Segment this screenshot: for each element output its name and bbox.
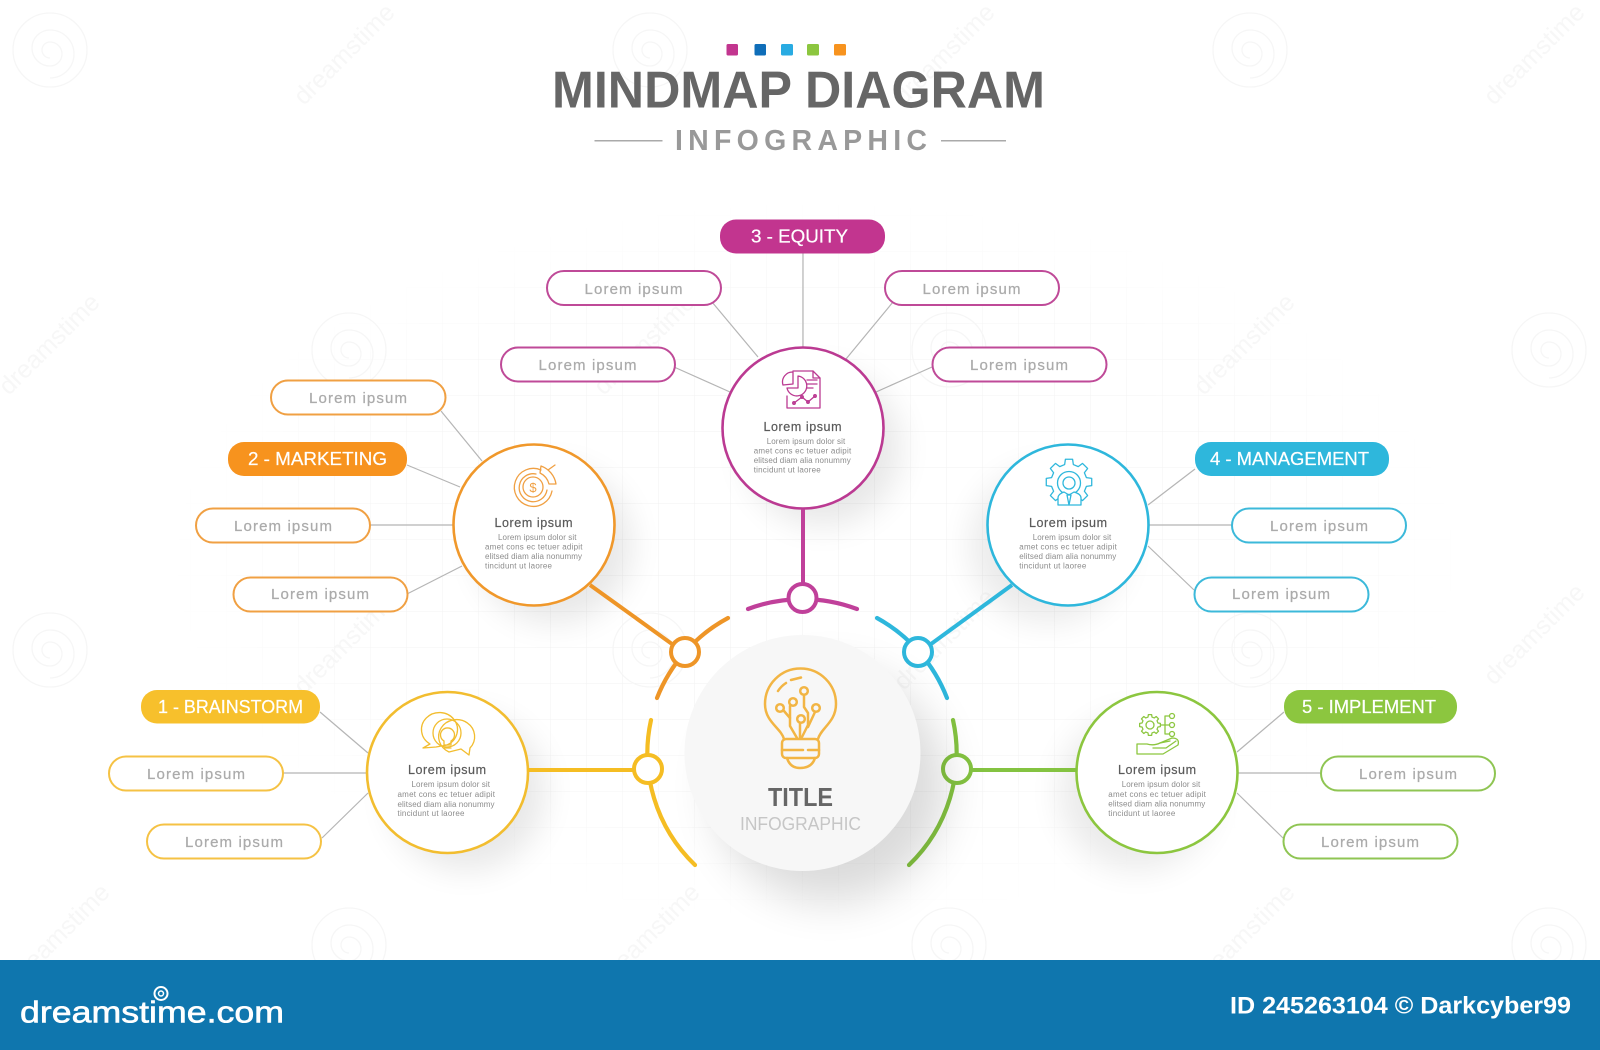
heading: Lorem ipsum: [494, 516, 572, 530]
footer credit: ID 245263104 © Darkcyber99: [1230, 992, 1571, 1019]
body text: tincidunt ut laoree: [754, 466, 821, 475]
branch: blue: [877, 585, 1012, 698]
pill: equity item 2: Lorem ipsum: [922, 281, 1020, 298]
pill: brainstorm item 2: Lorem ipsum: [185, 834, 283, 851]
central subtitle: INFOGRAPHIC: [740, 813, 861, 834]
heading: Lorem ipsum: [1029, 516, 1107, 530]
hub: arcs, nodes and connectors: [528, 509, 1077, 865]
pill: management item 2: [1194, 578, 1368, 612]
body text: Lorem ipsum dolor sit: [498, 533, 577, 542]
pill: marketing item 3: Lorem ipsum: [271, 586, 369, 603]
branch: purple: [748, 509, 857, 612]
panel: 1 brainstorm: [109, 690, 545, 870]
body text: amet cons ec tetuer adipit: [398, 790, 496, 799]
body text: elitsed diam alia nonummy: [1108, 800, 1205, 809]
pill: brainstorm item 1: Lorem ipsum: [147, 766, 245, 783]
background grid: [292, 268, 1337, 848]
pill: marketing item 2: Lorem ipsum: [234, 518, 332, 535]
circle shadow: [970, 467, 1126, 623]
tag: 1 brainstorm: [141, 690, 320, 724]
subtitle with rules: INFOGRAPHIC: [675, 125, 927, 157]
body text: Lorem ipsum dolor sit: [412, 780, 491, 789]
icon: gear, nodes and hand: [1137, 714, 1178, 754]
connectors: marketing: [370, 411, 482, 594]
central title: TITLE: [768, 782, 833, 812]
tag: 4 management: [1195, 442, 1389, 476]
body text: Lorem ipsum dolor sit: [1122, 780, 1201, 789]
body text: elitsed diam alia nonummy: [398, 800, 494, 809]
connectors: implement: [1237, 712, 1320, 838]
central circle: [684, 635, 946, 902]
circle: equity: [722, 348, 884, 508]
pill: equity item 4: [932, 348, 1106, 382]
heading: Lorem ipsum: [408, 763, 486, 777]
body text: [485, 533, 583, 570]
icon: report document: [783, 371, 820, 408]
circle shadow: [389, 714, 545, 870]
circle: brainstorm: [367, 692, 528, 853]
body text: Lorem ipsum dolor sit: [767, 437, 846, 446]
watermark layer: dreamstime: [1478, 0, 1590, 110]
icon: circuit light bulb: [765, 668, 836, 768]
footer logo: dreamstime.com: [20, 995, 284, 1030]
pill: equity item 1: [547, 271, 721, 305]
body text: [1019, 533, 1118, 571]
branch: orange: [590, 585, 728, 698]
body text: elitsed diam alia nonummy: [1019, 552, 1116, 561]
heading: Lorem ipsum: [764, 420, 842, 434]
watermark layer: dreamstime: [1188, 288, 1300, 400]
pill: management item 2: Lorem ipsum: [1232, 586, 1330, 603]
pill: equity item 3: [501, 348, 675, 382]
icon: speech bubbles with bulb: [421, 713, 475, 755]
pill: management item 1: Lorem ipsum: [1270, 518, 1368, 535]
watermark layer: dreamstime: [888, 0, 1000, 110]
body text: tincidunt ut laoree: [398, 809, 465, 818]
watermark layer: dreamstime: [3, 878, 115, 990]
body text: amet cons ec tetuer adipit: [1108, 790, 1207, 799]
body text: amet cons ec tetuer adipit: [1019, 542, 1118, 551]
central disc: [684, 635, 920, 871]
tag: 3 equity: 3 - EQUITY: [751, 226, 848, 246]
pill: management item 1: [1232, 508, 1406, 542]
pill: marketing item 3: [234, 578, 408, 612]
pill: implement item 2: [1284, 824, 1458, 858]
tag: 2 marketing: [228, 442, 407, 476]
colour squares: [726, 44, 846, 56]
body text: amet cons ec tetuer adipit: [485, 542, 583, 552]
pill: equity item 2: [885, 271, 1059, 305]
body text: amet cons ec tetuer adipit: [754, 446, 852, 455]
tag: 5 implement: 5 - IMPLEMENT: [1302, 697, 1436, 717]
connectors: equity: [674, 253, 932, 392]
pill: implement item 1: [1321, 756, 1495, 790]
branch: yellow: [528, 720, 695, 865]
main title: MINDMAP DIAGRAM: [552, 62, 1045, 120]
panel: 3 equity: [501, 220, 1106, 526]
pill: equity item 1: Lorem ipsum: [584, 281, 682, 298]
icon: dollar target: [514, 465, 556, 506]
watermark layer: dreamstime: [1188, 878, 1300, 990]
panel: 5 implement: [1059, 690, 1495, 870]
central shadow: [714, 670, 946, 902]
pill: marketing item 1: [271, 380, 446, 414]
tag: 2 marketing: 2 - MARKETING: [248, 449, 387, 469]
branch: green: [909, 720, 1077, 865]
body text: elitsed diam alia nonummy: [485, 552, 582, 561]
connectors: management: [1148, 469, 1232, 590]
circle: implement: [1076, 692, 1238, 853]
tag: 3 equity: [720, 220, 885, 254]
heading: Lorem ipsum: [1118, 763, 1196, 777]
body text: tincidunt ut laoree: [1108, 809, 1176, 818]
panel: 2 marketing: [196, 380, 632, 623]
circle: management: [988, 444, 1148, 606]
icon: gear with person: [1046, 459, 1092, 505]
watermark layer: dreamstime: [888, 583, 1000, 695]
footer band: [0, 960, 1600, 1050]
pill: brainstorm item 1: [109, 756, 283, 790]
tag: 5 implement: [1284, 690, 1457, 724]
body text: elitsed diam alia nonummy: [754, 456, 851, 465]
watermark layer: dreamstime: [593, 878, 705, 990]
body text: [754, 437, 852, 475]
watermark layer: dreamstime: [1478, 578, 1590, 690]
pill: brainstorm item 2: [147, 824, 321, 858]
pill: marketing item 2: [196, 508, 370, 542]
pill: equity item 3: Lorem ipsum: [538, 357, 636, 374]
body text: [398, 780, 496, 818]
tag: 1 brainstorm: 1 - BRAINSTORM: [158, 697, 303, 717]
icon: dollar target: $: [529, 480, 537, 495]
watermark layer: dreamstime: [288, 0, 400, 110]
watermark layer: dreamstime: [288, 588, 400, 700]
pill: equity item 4: Lorem ipsum: [970, 357, 1068, 374]
circle shadow: [745, 370, 901, 526]
circle shadow: [1059, 714, 1215, 870]
panel: 4 management: [970, 442, 1406, 623]
pill: marketing item 1: Lorem ipsum: [309, 390, 407, 407]
tag: 4 management: 4 - MANAGEMENT: [1210, 449, 1369, 469]
circle shadow: [476, 467, 632, 623]
connectors: brainstorm: [283, 712, 368, 838]
body text: [1108, 780, 1207, 818]
body text: tincidunt ut laoree: [1019, 562, 1087, 571]
circle: marketing: [454, 444, 614, 606]
watermark layer: dreamstime: [588, 288, 700, 400]
pill: implement item 1: Lorem ipsum: [1359, 766, 1457, 783]
pill: implement item 2: Lorem ipsum: [1321, 834, 1419, 851]
body text: tincidunt ut laoree: [485, 562, 553, 570]
body text: Lorem ipsum dolor sit: [1033, 533, 1112, 542]
